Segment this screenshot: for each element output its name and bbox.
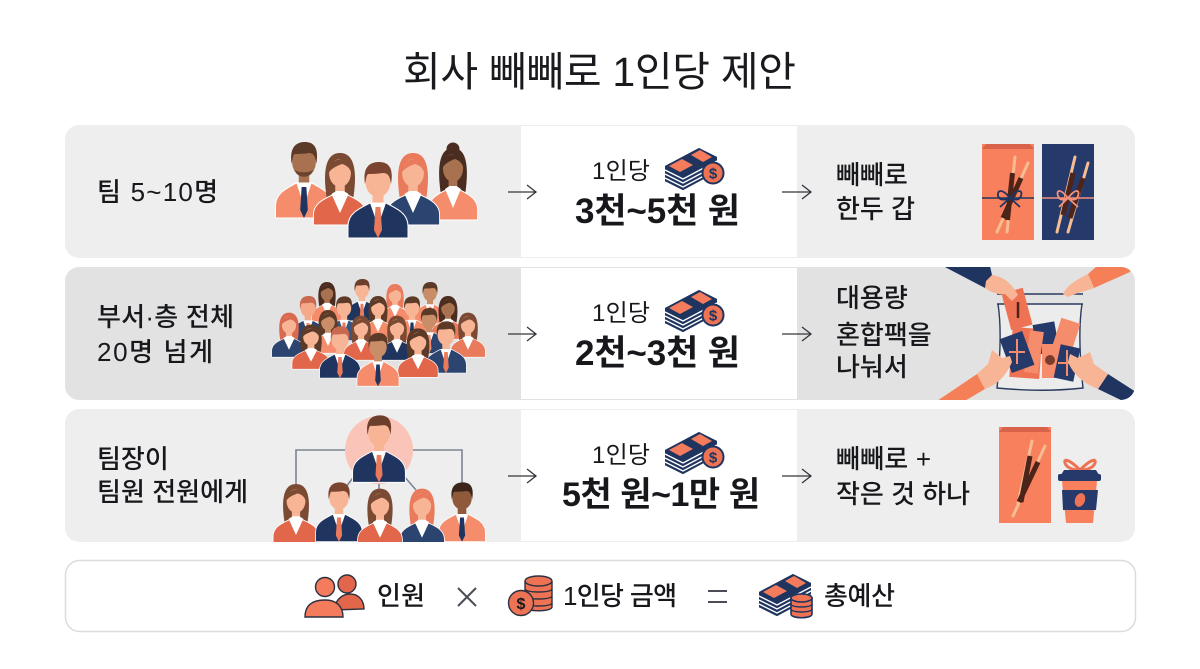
icon: coin stacks: $ [517, 596, 526, 613]
label: product plus: 빼빼로 + [836, 444, 931, 474]
icon: team of five people [276, 142, 478, 238]
multiply sign [458, 588, 476, 606]
label: total budget: 총예산 [824, 581, 895, 611]
panel: team leader row [65, 409, 1135, 548]
label: share: 나눠서 [836, 352, 908, 382]
icon: large crowd [272, 279, 485, 386]
label: department: 부서·층 전체 [97, 302, 234, 332]
label: large: 대용량 [836, 283, 908, 313]
label: amount per person: 1인당 금액 [563, 581, 677, 611]
title: 회사 빼빼로 1인당 제안 [403, 49, 796, 95]
label: quantity: 한두 갑 [836, 194, 915, 224]
label: per person: 1인당 [592, 158, 650, 185]
icon: coffee cup with bow [1058, 460, 1101, 523]
icon: cash stack [665, 432, 724, 475]
arrow [782, 469, 811, 483]
arrow [782, 185, 811, 199]
panel: department row [65, 266, 1136, 402]
label: team leader: 팀장이 [97, 444, 169, 474]
label: headcount: 20명 넘게 [97, 337, 213, 367]
label: small item: 작은 것 하나 [836, 479, 970, 509]
arrow [508, 185, 536, 199]
amount: 3천~5천 원 [575, 192, 740, 231]
arrow [508, 327, 536, 341]
label: product: 빼빼로 [836, 160, 908, 190]
icon: org chart of leader and team [273, 415, 485, 548]
label: per person: 1인당 [592, 300, 650, 327]
panel: budget formula [66, 560, 1136, 632]
icon: navy pepero pack [1042, 144, 1094, 240]
panel: team row [65, 125, 1135, 258]
equals sign [708, 591, 727, 602]
label: all team members: 팀원 전원에게 [97, 477, 248, 507]
amount: 5천 원~1만 원 [562, 476, 760, 514]
label: team size: 팀 5~10명 [97, 177, 218, 207]
label: mixed pack: 혼합팩을 [836, 320, 932, 350]
icon: total budget [759, 574, 812, 618]
icon: cash stack [665, 290, 724, 333]
icon: pepero pack [999, 427, 1051, 523]
icon: coin stacks [508, 576, 552, 616]
amount: 2천~3천 원 [575, 334, 740, 373]
illustration: hands sharing a bag of packs [937, 266, 1136, 402]
arrow [508, 469, 536, 483]
label: headcount: 인원 [377, 581, 425, 611]
icon: orange pepero pack [982, 144, 1034, 240]
arrow [782, 327, 811, 341]
icon: cash stack [665, 148, 724, 191]
label: per person: 1인당 [592, 442, 650, 469]
icon: people [305, 575, 364, 617]
